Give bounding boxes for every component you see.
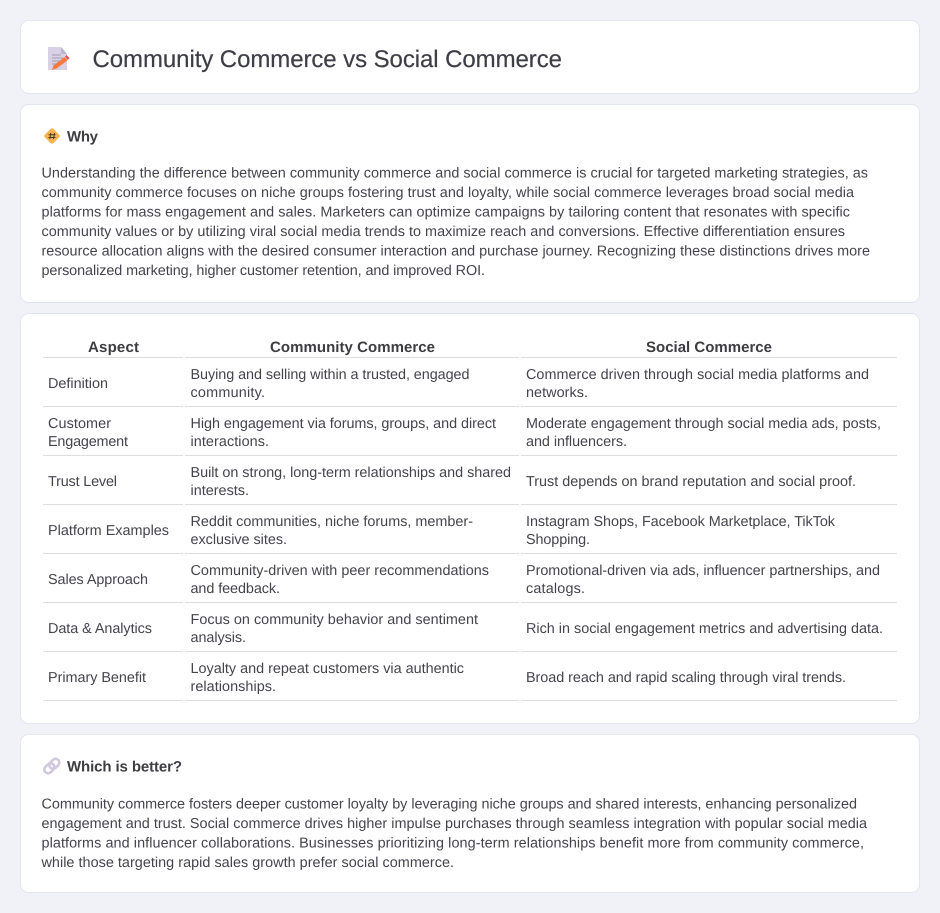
table row: customer engagement: Engagement (48, 434, 128, 450)
heading: why: Why (67, 128, 99, 146)
table row: sales approach: catalogs. (526, 581, 585, 597)
table row: sales approach: Community-driven with peer recommendations (190, 563, 489, 579)
table row: data and analytics: analysis. (190, 630, 246, 646)
text block: why paragraph: platforms for mass engagement and sales. Marketers can optimize campaigns by tailoring content that resonates with specific (42, 204, 850, 220)
table row: customer engagement: High engagement via forums, groups, and direct (190, 416, 496, 432)
text block: why paragraph: resource allocation aligns with the desired consumer interaction and purchase journey. Recognizing these distinctions drives more (42, 244, 870, 260)
table row: definition: Buying and selling within a trusted, engaged (190, 367, 470, 383)
table row: definition: community. (190, 385, 265, 401)
heading: which is better: Which is better? (67, 758, 182, 776)
table row: data and analytics: Focus on community behavior and sentiment (190, 612, 478, 628)
table row: trust level (43, 465, 897, 505)
table row: platform examples (43, 514, 897, 554)
table row: primary benefit: relationships. (190, 679, 276, 695)
table row: primary benefit: Broad reach and rapid scaling through viral trends. (526, 670, 846, 686)
text block: which is better paragraph (40, 796, 867, 871)
table header row (43, 339, 897, 358)
text block: why paragraph: personalized marketing, higher customer retention, and improved ROI. (42, 263, 485, 279)
text block: why paragraph: Understanding the difference between community commerce and social commerce is crucial for targeted marketing strategies, as (42, 166, 868, 182)
table row: data and analytics (43, 612, 897, 652)
table row: platform examples: Reddit communities, niche forums, member- (190, 514, 473, 530)
table row: customer engagement: Moderate engagement through social media ads, posts, (526, 416, 881, 432)
icon: document with pencil (48, 47, 70, 70)
table row: sales approach: and feedback. (190, 581, 280, 597)
table row: data and analytics: Rich in social engagement metrics and advertising data. (526, 621, 883, 637)
table row: platform examples: Shopping. (526, 532, 590, 548)
title: Community Commerce vs Social Commerce (92, 46, 562, 73)
icon: chain link (43, 757, 61, 775)
table row: definition (43, 367, 897, 407)
text block: why paragraph: community commerce focuses on niche groups fostering trust and loyalty, while social commerce leverages broad social media (42, 185, 854, 201)
table row: platform examples: Instagram Shops, Facebook Marketplace, TikTok (526, 514, 836, 530)
panel: comparison table (20, 314, 920, 724)
text block: which is better paragraph: platforms and influencer collaborations. Businesses prioritizing long-term relationships benefit more from community commerce, (42, 836, 864, 852)
table header row: Aspect (88, 339, 139, 356)
table row: customer engagement: and influencers. (526, 434, 627, 450)
table header row: Social Commerce (646, 339, 772, 356)
panel: title header (20, 20, 920, 94)
table row: primary benefit: Primary Benefit (48, 670, 146, 686)
text block: which is better paragraph: while those targeting rapid sales growth prefer social commerce. (40, 855, 454, 871)
table row: customer engagement (43, 416, 897, 456)
text block: why paragraph (42, 166, 870, 279)
table row: platform examples: exclusive sites. (190, 532, 287, 548)
table row: trust level: Built on strong, long-term relationships and shared (190, 465, 511, 481)
table row: definition: networks. (526, 385, 588, 401)
table row: definition: Commerce driven through social media platforms and (526, 367, 869, 383)
table row: definition: Definition (48, 376, 108, 392)
table row: data and analytics: Data & Analytics (48, 621, 152, 637)
table row: sales approach: Promotional-driven via ads, influencer partnerships, and (526, 563, 880, 579)
table row: sales approach (43, 563, 897, 603)
table row: primary benefit: Loyalty and repeat customers via authentic (190, 661, 464, 677)
table row: customer engagement: Customer (48, 416, 111, 432)
text block: why paragraph: community values or by utilizing viral social media trends to maximize reach and conversions. Effective differentiation ensures (42, 224, 845, 240)
table row: sales approach: Sales Approach (48, 572, 148, 588)
table row: customer engagement: interactions. (190, 434, 269, 450)
table row: platform examples: Platform Examples (48, 523, 169, 539)
panel: which is better (20, 734, 920, 892)
table row: trust level: interests. (190, 483, 249, 499)
table row: primary benefit (43, 661, 897, 701)
table row: trust level: Trust Level (48, 474, 117, 490)
text block: which is better paragraph: engagement and trust. Social commerce drives higher impulse purchases through seamless integration with popular social media (42, 816, 867, 832)
panel: why (20, 104, 920, 302)
icon: warning diamond (44, 128, 60, 144)
table header row: Community Commerce (270, 339, 435, 356)
text block: which is better paragraph: Community commerce fosters deeper customer loyalty by leveraging niche groups and shared interests, enhancing personalized (42, 796, 857, 812)
table row: trust level: Trust depends on brand reputation and social proof. (526, 474, 856, 490)
